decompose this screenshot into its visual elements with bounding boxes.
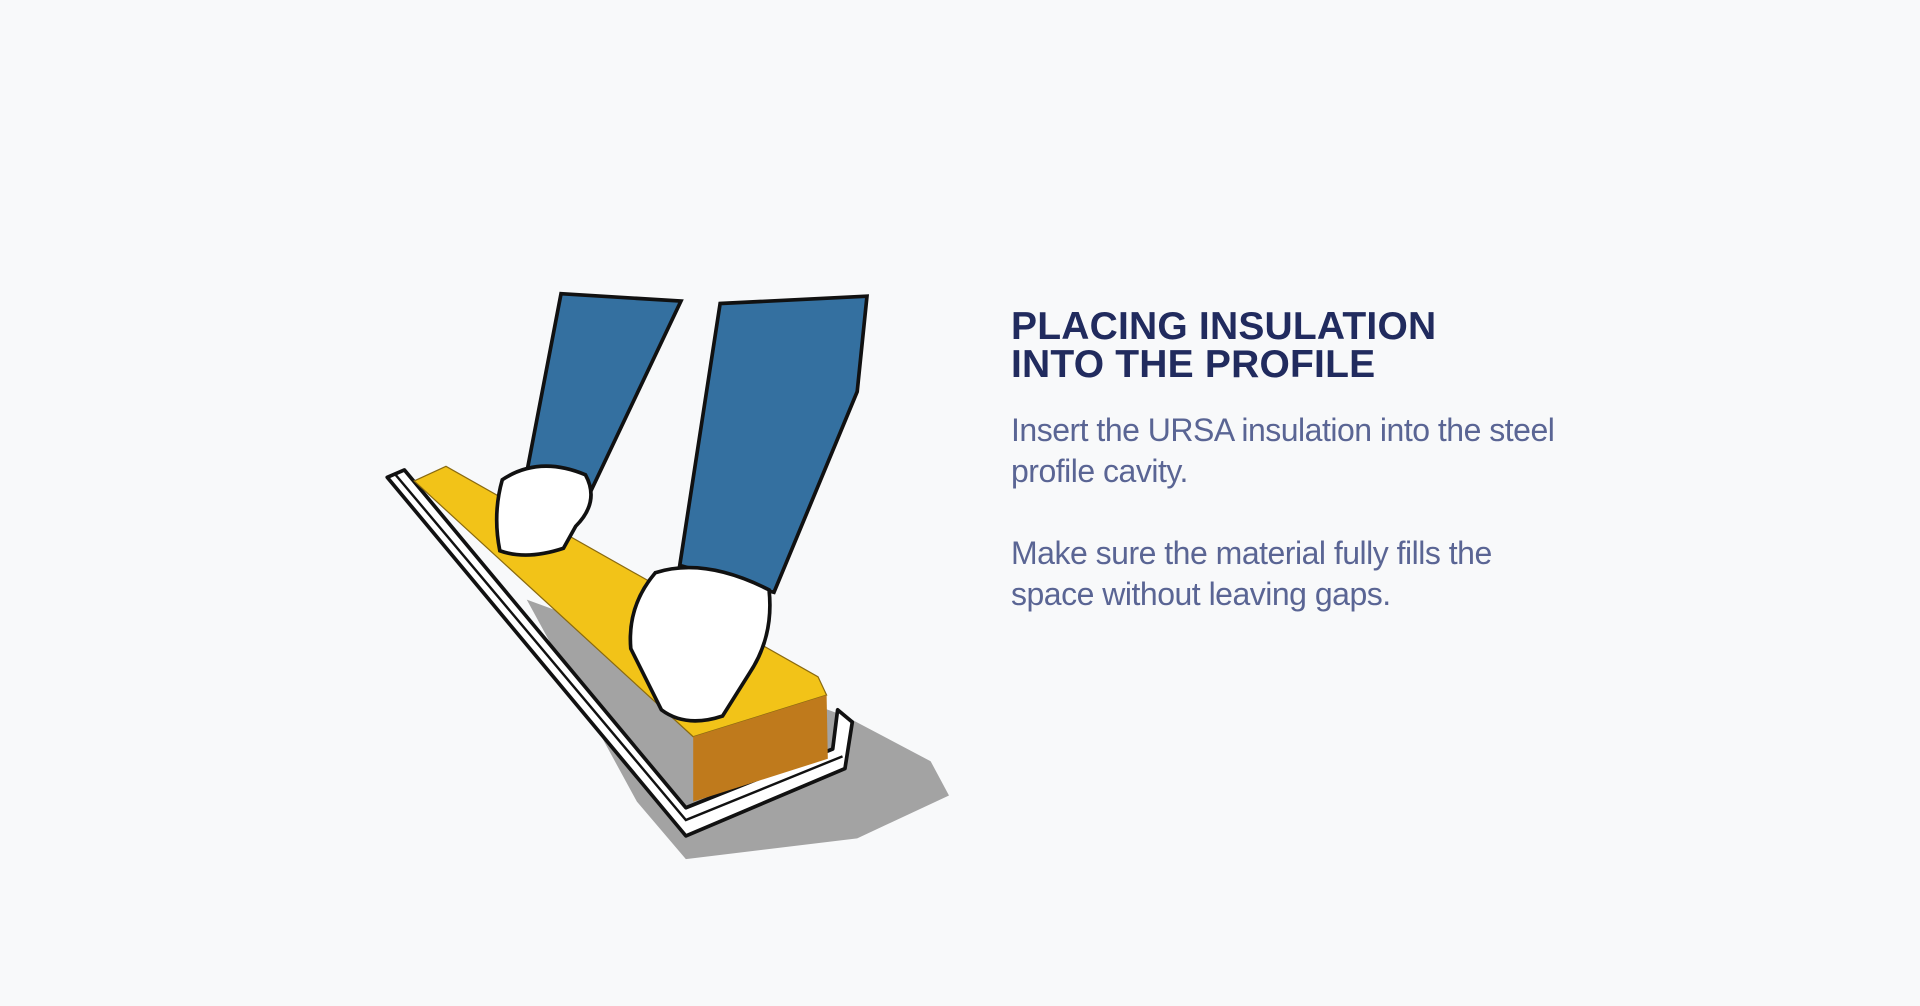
right sleeve bbox=[680, 296, 867, 592]
title: PLACING INSULATION bbox=[1011, 305, 1436, 348]
shadow bbox=[527, 600, 949, 859]
body text bbox=[1011, 412, 1554, 612]
body text: Make sure the material fully fills the bbox=[1011, 535, 1492, 571]
steel channel bbox=[387, 470, 852, 836]
body text: space without leaving gaps. bbox=[1011, 576, 1391, 612]
title: INTO THE PROFILE bbox=[1011, 343, 1375, 386]
right glove bbox=[630, 568, 770, 721]
left sleeve bbox=[527, 294, 681, 492]
body text: profile cavity. bbox=[1011, 453, 1188, 489]
left glove bbox=[497, 466, 591, 555]
title bbox=[1011, 305, 1436, 386]
insulation bbox=[414, 466, 828, 802]
body text: Insert the URSA insulation into the steel bbox=[1011, 412, 1554, 448]
